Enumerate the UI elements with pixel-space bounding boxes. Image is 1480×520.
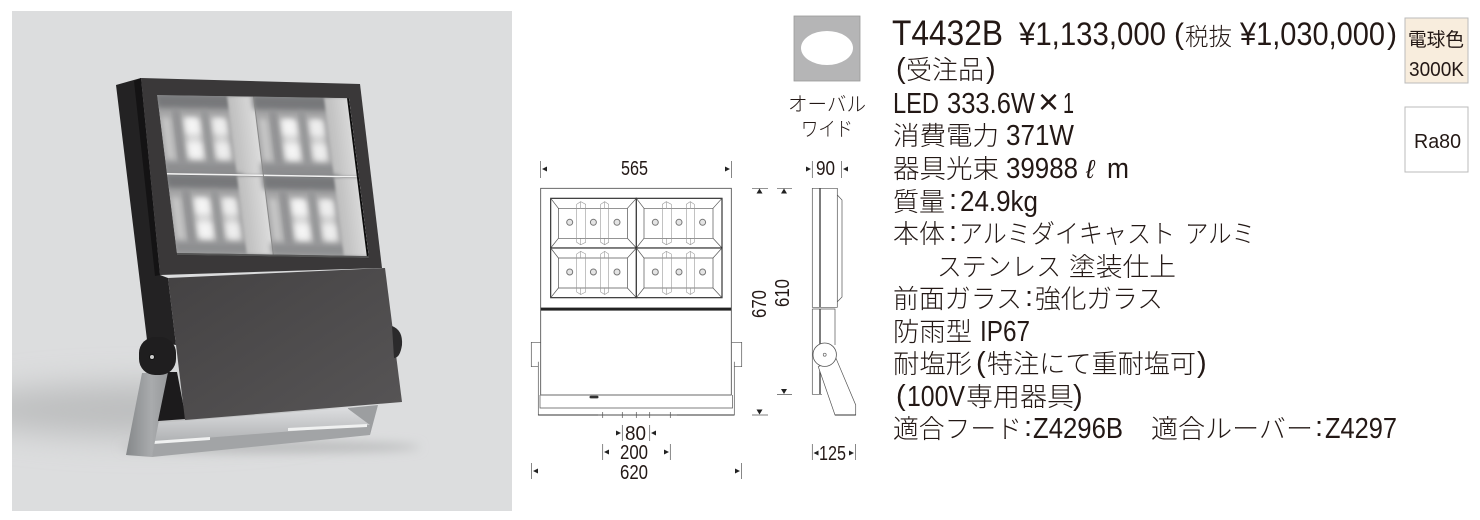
- dimension: 90: 90: [816, 158, 835, 180]
- specification text: 1: [1063, 88, 1074, 120]
- lower box: [168, 268, 402, 420]
- photo background: [12, 11, 512, 511]
- dimension: 620: 620: [620, 462, 648, 484]
- specification text: ×: [1038, 81, 1059, 122]
- beam label: [788, 94, 866, 141]
- specification text: 100V: [907, 381, 966, 413]
- lens bump: [837, 195, 842, 302]
- specification text: ): [1073, 380, 1083, 412]
- badge: colour temperature: 電球色: [1408, 29, 1464, 51]
- contact shadow: [120, 441, 420, 453]
- dimension: 610: 610: [772, 279, 794, 307]
- lower body: [812, 309, 835, 394]
- title and price: ): [1387, 18, 1397, 51]
- specification text: :: [1025, 281, 1033, 313]
- specification text: [893, 53, 1397, 445]
- title and price: ¥1,133,000: [1018, 16, 1166, 52]
- front outline: [541, 188, 731, 395]
- housing side: [116, 78, 176, 345]
- specification text: 専用器具: [966, 382, 1074, 412]
- specification text: 39988: [1006, 153, 1078, 185]
- title and price: (: [1174, 18, 1184, 51]
- title and price: 税抜: [1185, 24, 1232, 51]
- pivot knob: [813, 343, 836, 366]
- specification text: ステンレス: [937, 252, 1061, 282]
- badge: colour temperature: [1405, 18, 1468, 83]
- badge: colour temperature: 3000K: [1409, 59, 1465, 81]
- specification text: 適合フード: [893, 414, 1022, 444]
- mounting holes: [598, 412, 677, 418]
- dimension: 80: 80: [625, 423, 646, 445]
- upper body: [812, 188, 837, 307]
- dimension: 125: 125: [819, 443, 846, 465]
- dimension: 670: 670: [749, 290, 771, 318]
- specification text: Z4297: [1325, 413, 1397, 445]
- dimension: 610: [772, 188, 794, 394]
- beam label: オーバル: [788, 94, 866, 116]
- specification text: (: [976, 347, 986, 379]
- left knob: [139, 337, 176, 375]
- specification text: :: [1024, 411, 1032, 443]
- title and price: ¥1,030,000: [1239, 16, 1385, 52]
- specification text: Z4296B: [1033, 413, 1123, 445]
- specification text: 333.6W: [947, 88, 1036, 120]
- panel: product photo: [0, 11, 512, 511]
- right knob: [392, 326, 402, 358]
- specification text: (: [896, 53, 906, 85]
- specification text: m: [1107, 153, 1129, 185]
- specification text: 受注品: [906, 55, 984, 85]
- dimension: 80: [616, 423, 656, 445]
- bracket arm: [818, 358, 856, 415]
- specification text: :: [949, 184, 957, 216]
- dimension: 565: [540, 158, 732, 180]
- specification text: 防雨型: [893, 317, 972, 347]
- dimension: 90: [806, 158, 848, 180]
- specification text: 前面ガラス: [893, 284, 1022, 314]
- rear bracket arm: [348, 405, 378, 434]
- badge: Ra80: Ra80: [1414, 131, 1461, 153]
- dimension: 565: 565: [621, 158, 648, 180]
- specification text: 消費電力: [893, 121, 999, 151]
- beam label: ワイド: [801, 119, 853, 141]
- icon: oval wide beam: [794, 16, 860, 81]
- bracket: [538, 362, 734, 415]
- panel: side view drawing: [812, 188, 856, 415]
- bracket base: [152, 408, 370, 457]
- panel: front view drawing: [531, 188, 742, 418]
- title and price: [892, 14, 1397, 53]
- specification text: 適合ルーバー: [1151, 414, 1313, 444]
- side knobs: [531, 342, 742, 367]
- specification text: :: [1315, 411, 1323, 443]
- front bracket arm: [126, 373, 168, 457]
- specification text: アルミ: [1185, 219, 1255, 249]
- dimension: 200: 200: [620, 442, 648, 464]
- dimension: 200: [603, 442, 670, 464]
- specification text: LED: [893, 88, 939, 120]
- dimension: 670: [749, 188, 771, 415]
- specification text: 24.9kg: [960, 186, 1038, 218]
- specification text: ): [1197, 347, 1207, 379]
- reflector cells: [551, 198, 722, 298]
- specification text: 本体: [893, 219, 945, 249]
- specification text: 強化ガラス: [1035, 284, 1163, 314]
- specification text: 371W: [1006, 120, 1075, 152]
- black band: [541, 308, 731, 311]
- cable outlet: [590, 396, 598, 398]
- housing front frame: [141, 78, 382, 275]
- floor shadow: [0, 384, 340, 436]
- specification text: IP67: [980, 316, 1030, 348]
- specification text: ): [986, 53, 996, 85]
- specification text: :: [949, 216, 957, 248]
- title and price: T4432B: [892, 14, 1003, 53]
- specification text: (: [896, 380, 906, 412]
- specification text: 器具光束: [893, 154, 999, 184]
- specification text: アルミダイキャスト: [959, 219, 1175, 249]
- specification text: 塗装仕上: [1069, 252, 1176, 282]
- dimension: 620: [532, 462, 742, 484]
- specification text: 特注にて重耐塩可: [987, 349, 1196, 379]
- badge: Ra80: [1405, 107, 1468, 172]
- glass panel with LED modules: [155, 93, 372, 258]
- specification text: 質量: [893, 187, 945, 217]
- center rib: [819, 188, 821, 394]
- specification text: 耐塩形: [893, 349, 972, 379]
- specification text: ℓ: [1085, 154, 1096, 184]
